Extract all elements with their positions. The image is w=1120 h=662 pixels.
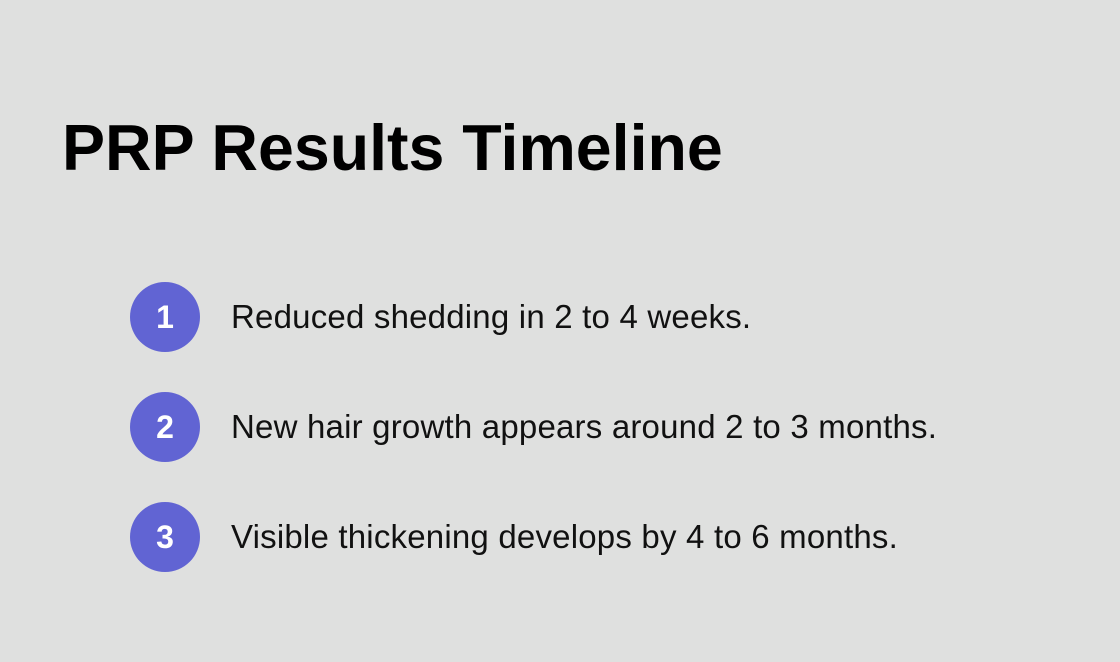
icon: number 1 circle: 1 bbox=[156, 299, 174, 335]
title: PRP Results Timeline bbox=[62, 112, 723, 184]
step 1 bbox=[130, 282, 751, 352]
icon: number 3 circle bbox=[130, 502, 200, 572]
step 2 bbox=[130, 392, 937, 462]
icon: number 3 circle: 3 bbox=[156, 519, 174, 555]
text: step 2: New hair growth appears around 2 to 3 months. bbox=[231, 408, 937, 445]
text: step 1: Reduced shedding in 2 to 4 weeks. bbox=[231, 298, 751, 335]
icon: number 2 circle bbox=[130, 392, 200, 462]
text: step 3: Visible thickening develops by 4 to 6 months. bbox=[231, 518, 898, 555]
icon: number 2 circle: 2 bbox=[156, 409, 174, 445]
icon: number 1 circle bbox=[130, 282, 200, 352]
step 3 bbox=[130, 502, 898, 572]
